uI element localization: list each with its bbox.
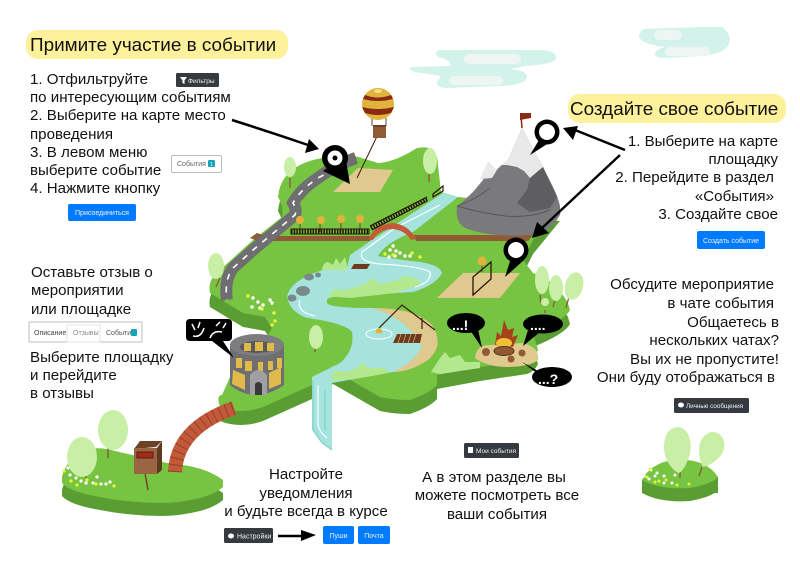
flag: [521, 116, 522, 128]
arrow: to field pin: [532, 155, 620, 238]
text block: create steps: 3. Создайте свое: [658, 206, 778, 223]
button: events: [172, 156, 222, 172]
bridge to small island: [175, 408, 234, 472]
text block: chat: Обсудите мероприятие: [610, 276, 774, 293]
text block: my events: ваши события: [447, 506, 547, 523]
button: mail: [358, 526, 390, 544]
text block: take part steps: 2. Выберите на карте место: [30, 107, 226, 124]
brown path: [250, 233, 533, 241]
arrow: to mountain pin: [563, 126, 625, 150]
text block: create steps: площадку: [708, 151, 778, 168]
tabs: venue: [29, 322, 142, 342]
sand beach: [373, 308, 438, 372]
left small island: [62, 410, 223, 516]
text block: chat: нескольких чатах?: [649, 332, 779, 349]
map pin 3: [504, 238, 528, 277]
flowers: [250, 244, 412, 310]
autumn trees: [296, 215, 486, 272]
tabs: venue: Отзывы: [73, 330, 99, 337]
arrow: to first pin: [232, 120, 319, 153]
main island: [208, 147, 586, 450]
text block: create steps: 2. Перейдите в раздел: [615, 169, 774, 186]
text block: take part steps: 1. Отфильтруйте: [30, 71, 148, 88]
sand lots: [333, 168, 393, 192]
button: my events: [464, 443, 519, 458]
text block: take part steps: проведения: [30, 126, 113, 143]
campfire: [475, 320, 538, 367]
arrow: settings to push: [278, 530, 316, 541]
text block: review: мероприятии: [31, 282, 124, 299]
speech bubble: question: [522, 362, 572, 387]
text block: take part steps: выберите событие: [30, 162, 161, 179]
speech bubble: exclamation: ...!: [452, 317, 468, 333]
text block: chat: Они буду отображаться в: [597, 369, 775, 386]
text block: take part steps: 4. Нажмите кнопку: [30, 180, 161, 197]
river: [287, 193, 458, 450]
text block: create steps: [615, 133, 778, 223]
text block: choose venue: в отзывы: [30, 385, 94, 402]
heading: create event: [568, 94, 786, 123]
tabs: venue: Описание: [34, 330, 66, 337]
speech bubble: dots: [523, 314, 563, 346]
text block: review: или площадке: [31, 301, 131, 318]
text block: take part steps: по интересующим событиям: [30, 89, 231, 106]
icon: trees: [664, 427, 725, 478]
text block: choose venue: [30, 349, 174, 402]
button: messages: Личные сообщения: [686, 402, 743, 410]
icon: flowers: [62, 466, 116, 488]
map pin 2: [530, 120, 560, 155]
text block: review: Оставьте отзыв о: [31, 264, 153, 281]
button: my events: Мои события: [476, 447, 516, 455]
text block: create steps: «События»: [695, 188, 774, 205]
shrubs: [322, 257, 480, 381]
heading: take part: Примите участие в событии: [30, 35, 276, 56]
text block: chat: в чате события: [667, 295, 774, 312]
icon: mailbox: [134, 441, 162, 490]
river highlights: [299, 205, 440, 438]
button: join: [68, 204, 136, 221]
button: join: Присоединиться: [75, 210, 129, 217]
text block: chat: Вы их не пропустите!: [630, 351, 779, 368]
text block: notifications: Настройте: [269, 466, 343, 483]
dock: [351, 264, 422, 343]
text block: take part steps: 3. В левом меню: [30, 144, 148, 161]
icon: trees: [67, 410, 128, 478]
icon: flowers: [642, 468, 690, 486]
text block: chat: Общаетесь в: [687, 314, 779, 331]
waterfall highlight: [313, 380, 332, 450]
button: messages: [674, 398, 749, 413]
map pin 1: [322, 145, 350, 184]
text block: notifications: уведомления: [259, 485, 353, 502]
button: create event: Создать событие: [703, 237, 759, 245]
heading: create event: Создайте свое событие: [570, 99, 778, 120]
button: settings: Настройки: [237, 532, 271, 540]
speech bubble: faces: [186, 319, 234, 358]
button: push: Пуши: [329, 533, 348, 540]
small trees: [208, 148, 586, 352]
button: push: [323, 526, 354, 544]
road: [226, 158, 356, 300]
button: events: 1: [210, 162, 213, 168]
colosseum: [230, 334, 284, 395]
speech bubble: exclamation: [447, 313, 485, 348]
text block: choose venue: и перейдите: [30, 367, 117, 384]
cloud right: [639, 27, 730, 58]
text block: my events: [415, 469, 579, 523]
cloud left: [410, 50, 556, 88]
mountain: [457, 113, 560, 236]
bridge: [369, 223, 416, 240]
fishing rod: [366, 305, 435, 339]
button: mail: Почта: [364, 533, 384, 540]
fence: [291, 186, 491, 295]
button: events: События: [177, 160, 206, 168]
tabs: venue: События: [106, 329, 135, 337]
text block: my events: можете посмотреть все: [415, 487, 579, 504]
text block: notifications: [224, 466, 388, 520]
speech bubble: dots: ....: [530, 317, 546, 333]
heading: take part: [26, 30, 288, 59]
text block: review: [31, 264, 153, 318]
speech bubble: question: ...?: [538, 371, 558, 387]
button: create event: [697, 231, 765, 249]
button: settings: [224, 528, 273, 543]
balloon: [357, 88, 394, 178]
text block: create steps: 1. Выберите на карте: [628, 133, 778, 150]
island top: [209, 147, 570, 411]
stones: [288, 272, 321, 302]
island side: [209, 161, 570, 425]
right small island: [642, 427, 725, 501]
text block: chat: [597, 276, 779, 386]
text block: notifications: и будьте всегда в курсе: [224, 503, 388, 520]
text block: take part steps: [30, 71, 231, 197]
button: filters: Фильтры: [188, 78, 215, 85]
button: filters: [176, 73, 219, 87]
text block: my events: А в этом разделе вы: [422, 469, 566, 486]
text block: choose venue: Выберите площадку: [30, 349, 174, 366]
